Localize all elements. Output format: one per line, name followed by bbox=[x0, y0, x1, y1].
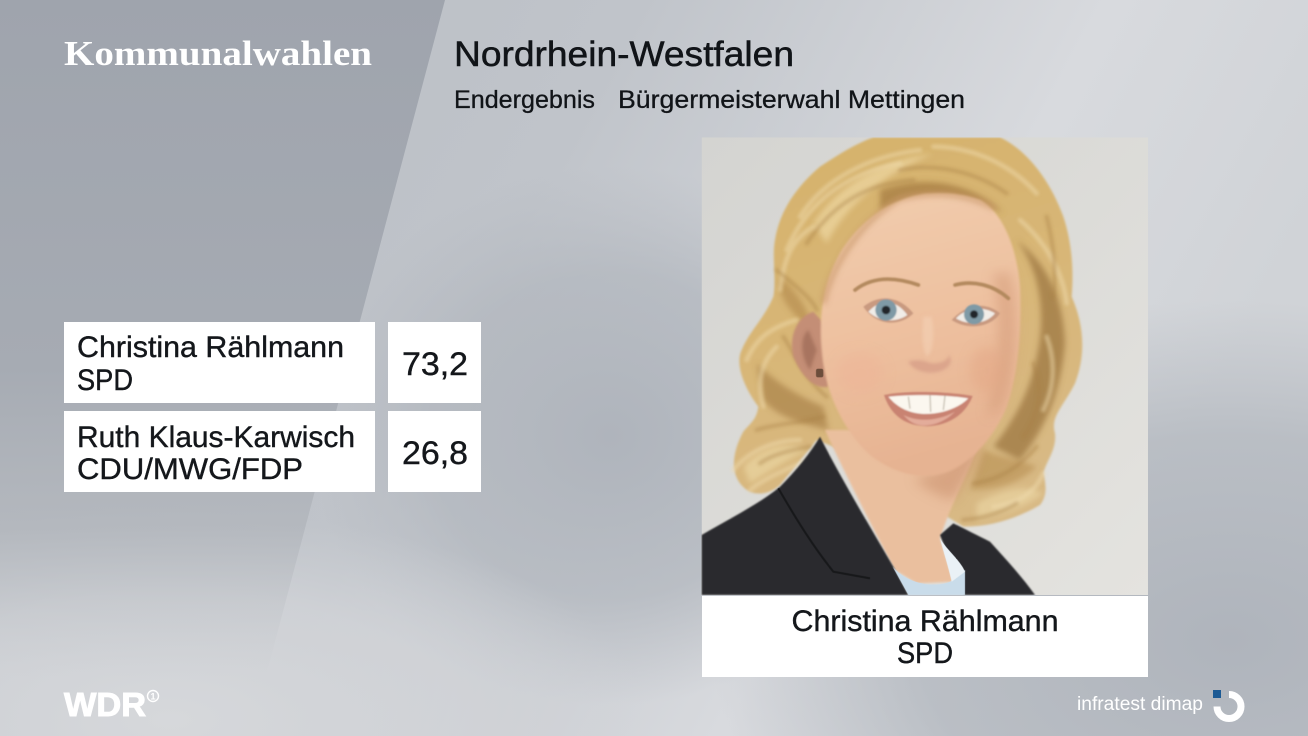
title: Nordrhein-Westfalen: Nordrhein-Westfalen bbox=[454, 35, 794, 74]
caption party: SPD bbox=[897, 637, 953, 670]
eye: left bbox=[863, 298, 913, 323]
WDR logo: 1 bbox=[150, 692, 156, 702]
jacket bbox=[702, 437, 908, 595]
earring bbox=[816, 369, 823, 377]
neck bbox=[825, 430, 977, 583]
infratest dimap logo: infratest dimap bbox=[1077, 694, 1203, 715]
row: Ruth Klaus-Karwisch name bbox=[64, 411, 375, 492]
nose bbox=[908, 317, 951, 373]
value: 26,8: 26,8 bbox=[402, 435, 468, 471]
row: Christina Rählmann name: SPD bbox=[77, 364, 133, 397]
subtitle: Bürgermeisterwahl Mettingen: Bürgermeisterwahl Mettingen bbox=[618, 86, 965, 114]
caption name: Christina Rählmann bbox=[792, 605, 1058, 638]
row: Ruth Klaus-Karwisch name: Ruth Klaus-Karwisch bbox=[77, 421, 355, 454]
blouse bbox=[893, 538, 965, 595]
row: Christina Rählmann name bbox=[64, 322, 375, 403]
neck shadow bbox=[918, 450, 981, 502]
hair shading bbox=[743, 153, 1065, 520]
infratest dimap logo bbox=[1077, 690, 1241, 718]
eyebrows bbox=[855, 279, 1008, 298]
icon: ring mark bbox=[1213, 690, 1241, 718]
header: Kommunalwahlen: Kommunalwahlen bbox=[64, 34, 372, 73]
WDR logo: WDR bbox=[64, 686, 146, 723]
caption panel bbox=[702, 596, 1148, 677]
value: 26,8 bbox=[388, 411, 481, 492]
hair strands bbox=[733, 147, 1067, 520]
ear bbox=[792, 312, 830, 387]
lapel line bbox=[778, 488, 870, 578]
face bbox=[821, 193, 1020, 476]
value: 73,2 bbox=[388, 322, 481, 403]
value: 73,2: 73,2 bbox=[402, 346, 468, 382]
subtitle: Endergebnis: Endergebnis bbox=[454, 86, 595, 114]
results table bbox=[64, 322, 481, 492]
row: Christina Rählmann name: Christina Rählmann bbox=[77, 331, 344, 364]
hair bbox=[734, 137, 1082, 527]
hairline shadow bbox=[823, 194, 995, 303]
portrait photo bbox=[702, 137, 1148, 595]
mouth bbox=[884, 392, 973, 426]
row: Ruth Klaus-Karwisch name: CDU/MWG/FDP bbox=[77, 453, 303, 486]
face shading bbox=[987, 273, 1016, 417]
eye: right bbox=[952, 304, 1000, 326]
